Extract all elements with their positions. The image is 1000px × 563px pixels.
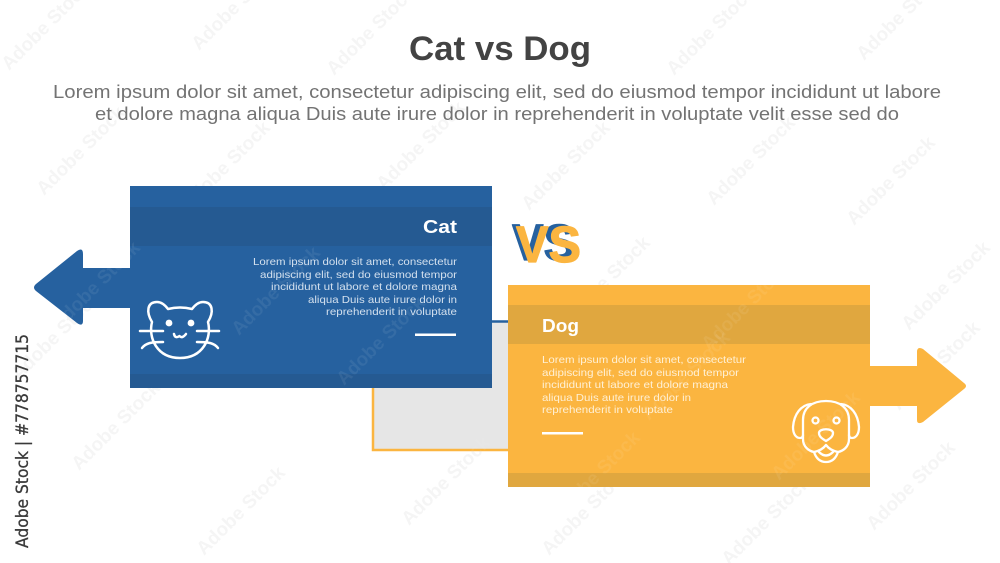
watermark over panels: Adobe Stock — [48, 237, 145, 335]
background watermark pattern: Adobe Stock — [33, 102, 130, 200]
background watermark pattern: Adobe Stock — [558, 232, 655, 330]
dog accent line — [542, 432, 583, 434]
cat body text: Lorem ipsum dolor sit amet, consectetur — [253, 256, 458, 268]
background watermark pattern: Adobe Stock — [8, 287, 105, 385]
dog arrow — [869, 348, 966, 423]
vs badge: VS — [512, 214, 575, 271]
vs badge: VS — [516, 216, 581, 273]
watermark over panels: Adobe Stock — [638, 327, 735, 425]
cat body text: reprehenderit in voluptate — [326, 306, 457, 318]
cat accent line — [415, 334, 456, 336]
cat arrow — [34, 250, 131, 325]
background watermark pattern: Adobe Stock — [373, 97, 470, 195]
watermark over panels: Adobe Stock — [398, 432, 495, 530]
dog body text: aliqua Duis aute irure dolor in — [542, 392, 691, 404]
watermark over panels: Adobe Stock — [548, 427, 645, 525]
cat header band — [130, 207, 492, 246]
subtitle text: Lorem ipsum dolor sit amet, consectetur adipiscing elit, sed do eiusmod tempor incididunt ut labore — [53, 81, 941, 102]
cat body text — [253, 256, 458, 318]
watermark over panels: Adobe Stock — [228, 242, 325, 340]
watermark over panels — [48, 237, 865, 530]
panel: dog — [508, 285, 966, 487]
cat heading: Cat — [423, 217, 457, 237]
dog body text: reprehenderit in voluptate — [542, 404, 673, 416]
background watermark pattern: Adobe Stock — [518, 117, 615, 215]
background watermark pattern: Adobe Stock — [68, 377, 165, 475]
watermark over panels: Adobe Stock — [768, 387, 865, 485]
background watermark pattern: Adobe Stock — [178, 117, 275, 215]
dog body text — [542, 354, 747, 416]
dog card background — [508, 285, 870, 487]
background watermark pattern: Adobe Stock — [193, 462, 290, 560]
background watermark pattern: Adobe Stock — [538, 462, 635, 560]
watermark over panels: Adobe Stock — [333, 292, 430, 390]
background watermark pattern: Adobe Stock — [398, 432, 495, 530]
icon: cat face — [140, 302, 219, 358]
background watermark pattern: Adobe Stock — [863, 437, 960, 535]
title: Cat vs Dog — [409, 30, 591, 68]
dog footer band — [508, 473, 870, 487]
watermark over panels: Adobe Stock — [698, 257, 795, 355]
grey connector panel — [373, 322, 509, 450]
cat body text: adipiscing elit, sed do eiusmod tempor — [260, 269, 458, 281]
dog body text: incididunt ut labore et dolore magna — [542, 379, 728, 391]
subtitle text — [53, 81, 941, 124]
dog body text: adipiscing elit, sed do eiusmod tempor — [542, 367, 740, 379]
watermark vertical credit: Adobe Stock | #778757715 — [13, 334, 33, 548]
cat footer band — [130, 374, 492, 388]
panel: cat — [34, 186, 492, 388]
icon: dog face — [793, 401, 859, 462]
background watermark pattern: Adobe Stock — [888, 317, 985, 415]
cat card background — [130, 186, 492, 388]
cat body text: incididunt ut labore et dolore magna — [271, 281, 457, 293]
dog header band — [508, 305, 870, 344]
background watermark pattern: Adobe Stock — [703, 112, 800, 210]
dog body text: Lorem ipsum dolor sit amet, consectetur — [542, 354, 747, 366]
background watermark pattern: Adobe Stock — [898, 237, 995, 335]
subtitle text: et dolore magna aliqua Duis aute irure dolor in reprehenderit in voluptate velit esse sed do — [95, 103, 899, 124]
cat body text: aliqua Duis aute irure dolor in — [308, 294, 457, 306]
background watermark pattern: Adobe Stock — [843, 132, 940, 230]
dog heading: Dog — [542, 316, 579, 336]
